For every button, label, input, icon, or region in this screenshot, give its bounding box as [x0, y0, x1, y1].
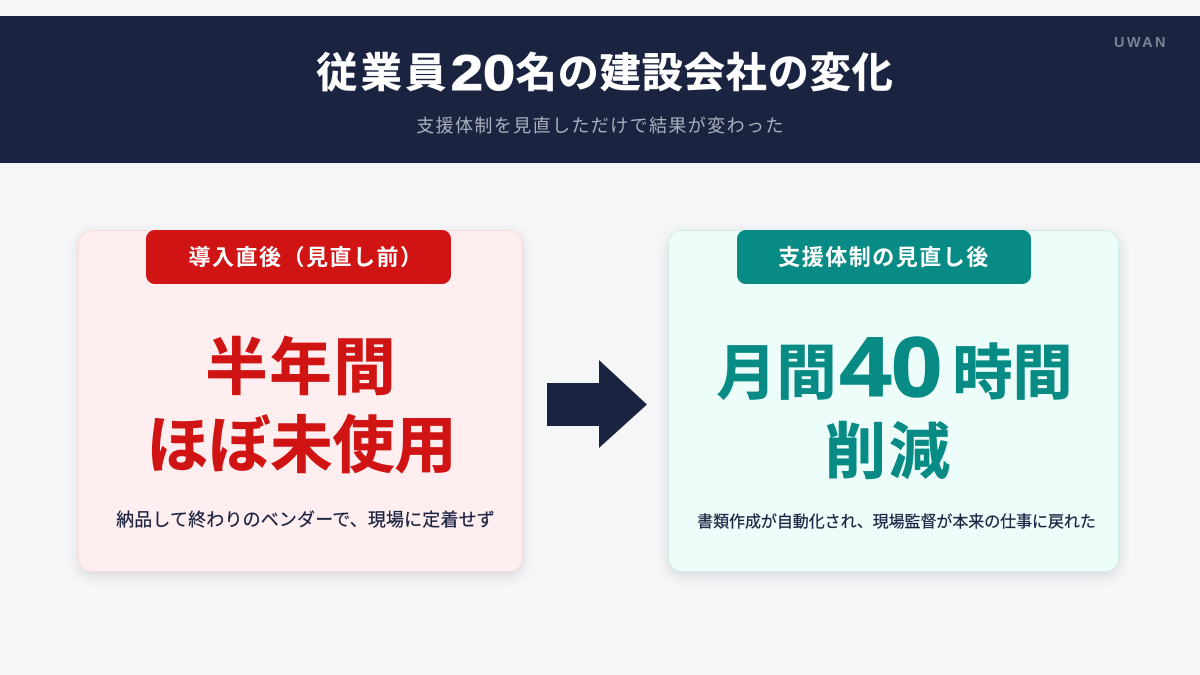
after headline: 削減 — [825, 418, 953, 486]
brand label: UWAN — [1114, 35, 1168, 51]
after description: 書類作成が自動化され、現場監督が本来の仕事に戻れた — [697, 514, 1096, 531]
after badge — [737, 230, 1031, 284]
before headline: ほぼ未使用 — [146, 412, 456, 481]
panel: after — [668, 230, 1119, 572]
panel: before — [78, 230, 523, 572]
before headline — [146, 334, 456, 481]
before headline: 半年間 — [205, 334, 398, 403]
title: 従業員 名の建設会社の変化 — [316, 50, 894, 96]
before badge: 導入直後（見直し前） — [188, 245, 424, 270]
header band — [0, 16, 1200, 163]
after headline: 40 — [839, 320, 942, 414]
before badge — [146, 230, 451, 284]
before description: 納品して終わりのベンダーで、現場に定着せず — [116, 510, 495, 530]
arrow — [547, 360, 647, 448]
after headline — [716, 320, 1072, 486]
subtitle: 支援体制を見直しただけで結果が変わった — [416, 116, 785, 136]
after headline: 月間 時間 — [716, 340, 1072, 407]
title: 20 — [450, 45, 515, 101]
after badge: 支援体制の見直し後 — [778, 245, 990, 270]
